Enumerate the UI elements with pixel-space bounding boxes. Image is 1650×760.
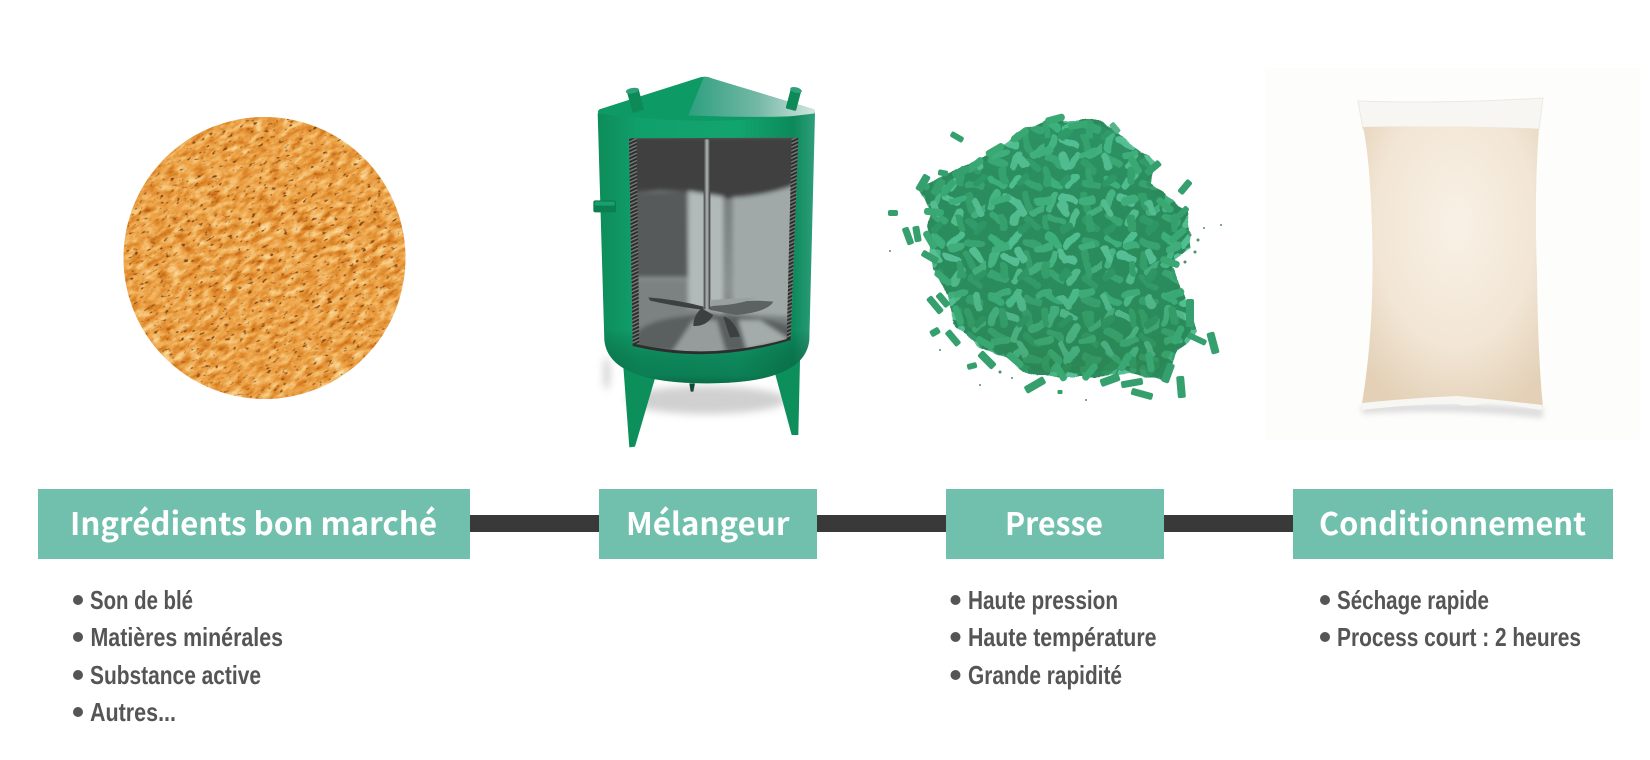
step 3 heading: Presse bbox=[1005, 499, 1103, 544]
list: ingredients: Autres... bbox=[90, 697, 176, 727]
list: ingredients: Matières minérales bbox=[90, 622, 283, 652]
sack bottom edge bbox=[1362, 396, 1543, 410]
sack shadow bbox=[1362, 403, 1543, 418]
cone highlight bbox=[688, 77, 815, 117]
dust specks bbox=[889, 224, 1222, 401]
step 2 heading: Mélangeur bbox=[626, 499, 790, 544]
image: sack bbox=[1265, 68, 1640, 440]
image: green pellets pile bbox=[888, 113, 1222, 401]
pile body bbox=[917, 120, 1195, 380]
image: bran circle bbox=[124, 117, 406, 399]
step 1 heading bbox=[38, 489, 470, 559]
cone roof bbox=[598, 77, 815, 123]
connector line bbox=[470, 515, 1293, 532]
image: mixer tank bbox=[593, 77, 815, 447]
edge pellets bbox=[922, 113, 1188, 382]
list: packaging bbox=[1320, 585, 1581, 652]
list: ingredients: Son de blé bbox=[90, 585, 193, 615]
step 2 heading bbox=[599, 489, 817, 559]
sack body bbox=[1362, 126, 1543, 407]
list: ingredients bbox=[73, 585, 283, 727]
sack top band bbox=[1358, 98, 1543, 129]
agitator shaft bbox=[704, 139, 710, 309]
tank body bbox=[598, 113, 815, 383]
list: press bbox=[950, 585, 1156, 690]
list: press: Grande rapidité bbox=[968, 660, 1122, 690]
blurred interior shading bbox=[627, 137, 800, 355]
step 4 heading bbox=[1293, 489, 1613, 559]
scattered pellets bbox=[888, 131, 1220, 400]
step 1 heading: Ingrédients bon marché bbox=[70, 499, 437, 544]
cut-away window bbox=[627, 137, 800, 355]
list: press: Haute pression bbox=[968, 585, 1118, 615]
agitator blades bbox=[648, 297, 773, 337]
sack backdrop bbox=[1265, 68, 1640, 440]
legs bbox=[623, 360, 800, 447]
list: packaging: Séchage rapide bbox=[1337, 585, 1489, 615]
step 3 heading bbox=[946, 489, 1164, 559]
list: packaging: Process court : 2 heures bbox=[1337, 622, 1581, 652]
pile shading bbox=[924, 124, 1188, 372]
insulation hatch strips bbox=[629, 138, 639, 346]
tank shadow bbox=[603, 357, 787, 414]
step 4 heading: Conditionnement bbox=[1319, 499, 1586, 544]
top nozzles bbox=[625, 86, 802, 113]
list: ingredients: Substance active bbox=[90, 660, 261, 690]
side nozzle bbox=[593, 200, 616, 212]
list: press: Haute température bbox=[968, 622, 1156, 652]
